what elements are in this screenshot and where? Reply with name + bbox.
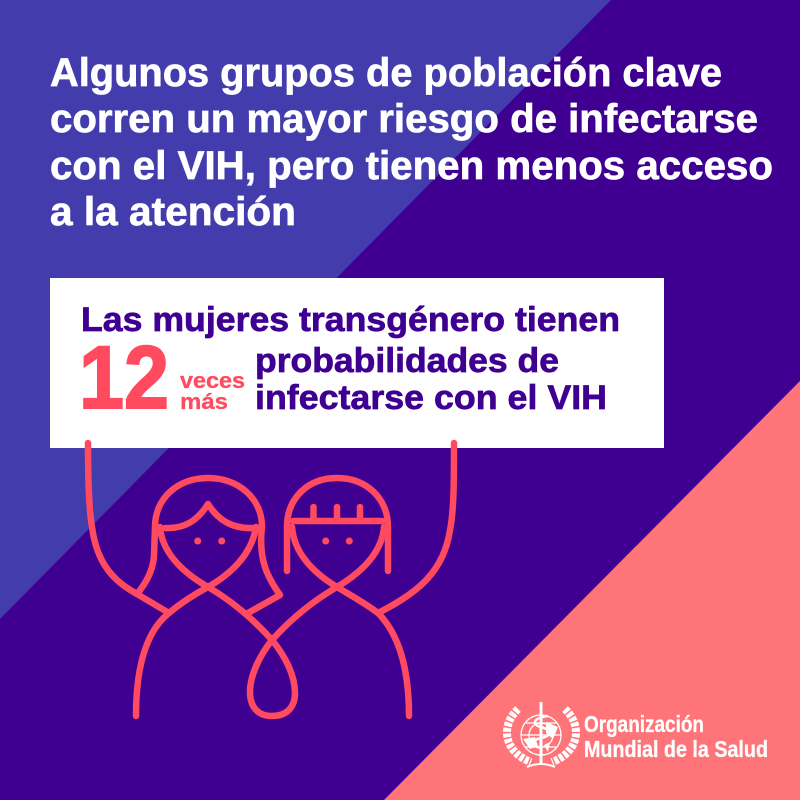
left figure: eyes bbox=[194, 538, 225, 544]
title bbox=[50, 51, 773, 234]
heading: transgender women: Las mujeres transgénero tienen bbox=[81, 301, 620, 339]
left figure: face outline bbox=[160, 527, 256, 587]
title: a la atención bbox=[50, 190, 296, 234]
logo: organisation name: Mundial de la Salud bbox=[584, 736, 768, 762]
emblem landmasses bbox=[523, 722, 558, 752]
emblem globe bbox=[521, 715, 561, 755]
right figure: fringe bbox=[293, 507, 382, 521]
left figure: body and ribbon loop bbox=[136, 587, 409, 716]
left figure: long hair bbox=[137, 527, 280, 613]
statistic unit: veces más: veces bbox=[180, 368, 245, 393]
title: Algunos grupos de población clave bbox=[50, 51, 722, 95]
background: light indigo diagonal bbox=[0, 0, 611, 619]
logo: WHO emblem bbox=[507, 702, 576, 767]
right arm bbox=[378, 443, 454, 613]
title: corren un mayor riesgo de infectarse bbox=[50, 97, 758, 141]
logo: organisation name bbox=[584, 711, 768, 762]
background: coral diagonal bbox=[384, 381, 800, 800]
statistic unit: veces más bbox=[180, 368, 245, 414]
statistic description: probabilidades de bbox=[255, 342, 559, 380]
left figure: hair fringe bbox=[165, 504, 254, 528]
emblem staff and serpent bbox=[540, 702, 542, 764]
emblem laurel wreath bbox=[507, 709, 576, 762]
right figure: short hair and head dome bbox=[287, 478, 388, 571]
panel: white statistic card bbox=[50, 278, 664, 448]
title: con el VIH, pero tienen menos acceso bbox=[50, 144, 773, 188]
statistic description bbox=[255, 342, 607, 417]
right figure: face outline bbox=[292, 527, 384, 587]
statistic unit: veces más: más bbox=[180, 389, 228, 414]
left figure: head dome bbox=[155, 478, 262, 527]
statistic description: infectarse con el VIH bbox=[255, 379, 607, 417]
illustration: two figures holding up the card bbox=[88, 443, 454, 716]
statistic: 12: 12 bbox=[79, 327, 169, 427]
left arm bbox=[88, 443, 169, 613]
logo: organisation name: Organización bbox=[584, 711, 704, 737]
right figure: eyes bbox=[322, 538, 353, 544]
emblem base bbox=[527, 764, 555, 767]
